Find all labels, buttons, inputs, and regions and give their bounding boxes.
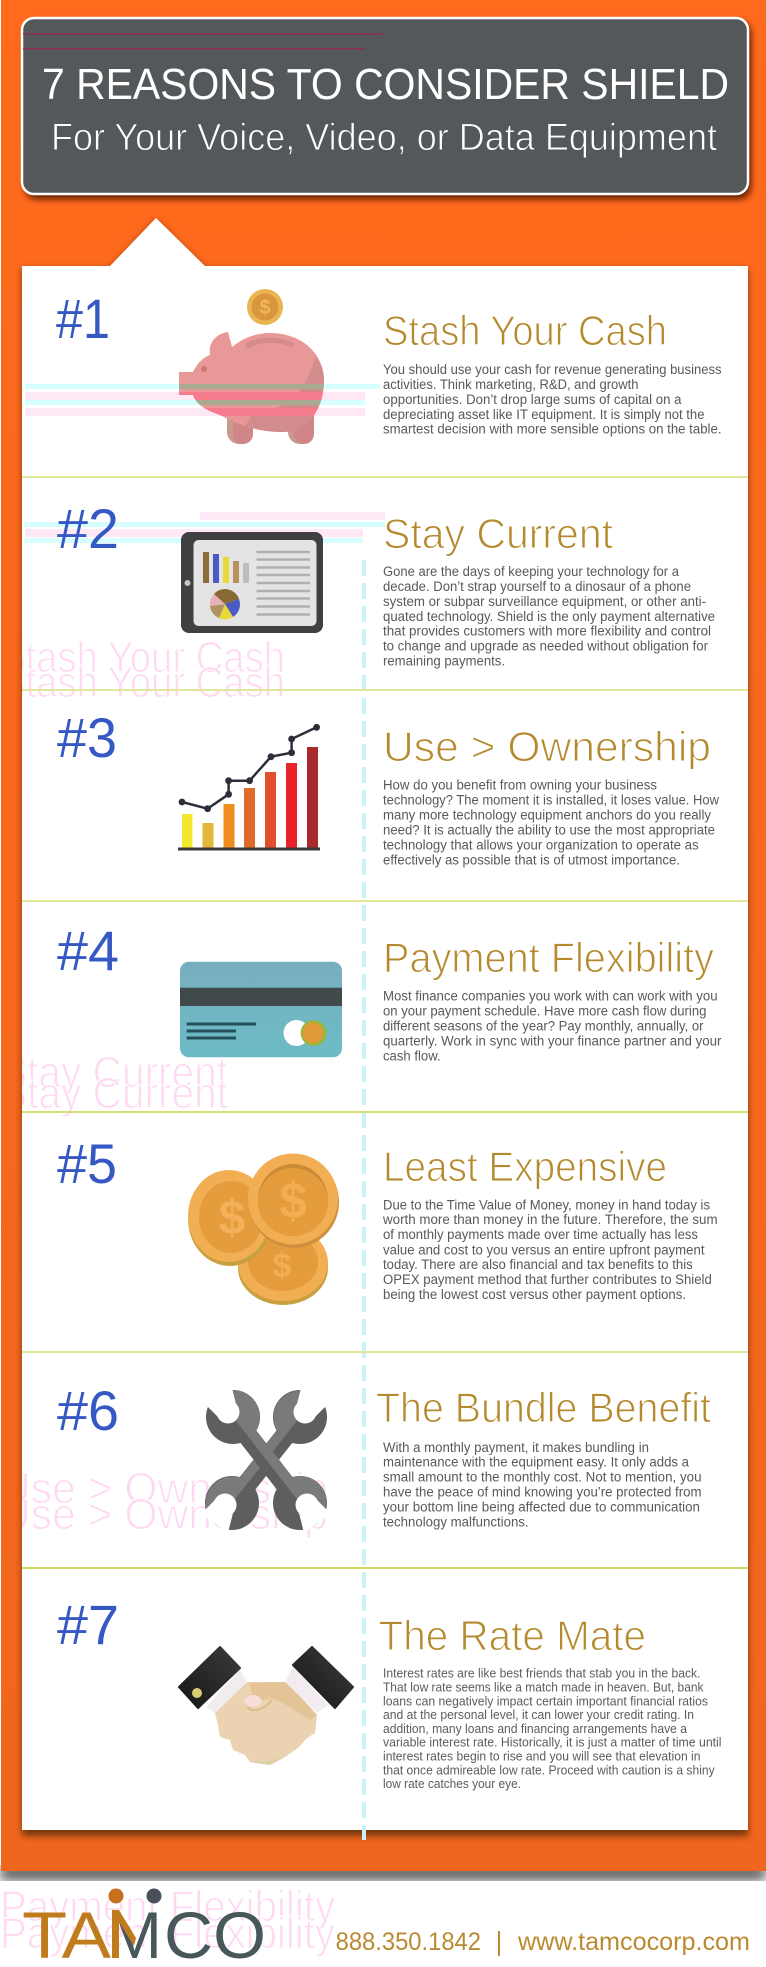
icon: gold coins: $ — [219, 1192, 246, 1245]
body text: opportunities. Don’t drop large sums of capital on a — [383, 392, 682, 407]
text: Stay Current — [0, 1069, 228, 1118]
text: Stay Current — [0, 1048, 228, 1097]
phone number: 888.350.1842 — [336, 1928, 481, 1956]
icon: gold coins — [188, 1154, 339, 1305]
website: www.tamcocorp.com — [517, 1928, 750, 1956]
body text — [383, 778, 719, 867]
body text: to change and upgrade as needed without obligation for — [383, 639, 708, 654]
body text: Due to the Time Value of Money, money in hand today is — [383, 1197, 710, 1212]
heading: Payment Flexibility — [383, 934, 714, 981]
title: 7 REASONS TO CONSIDER SHIELD — [42, 60, 729, 109]
text: Stash Your Cash — [0, 633, 285, 682]
body text: low rate catches your eye. — [383, 1777, 521, 1791]
text: Use > Ownership — [0, 1464, 328, 1513]
body text — [382, 1197, 718, 1302]
body text: on your payment schedule. Have more cash flow during — [383, 1004, 706, 1019]
body text: activities. Think marketing, R&D, and growth — [383, 377, 638, 392]
body text: How do you benefit from owning your business — [383, 778, 657, 793]
icon: gold coins: $ — [279, 1173, 307, 1229]
body text: remaining payments. — [383, 654, 505, 669]
body text — [383, 1440, 702, 1530]
number 4: #4 — [57, 919, 119, 982]
heading: Use > Ownership — [383, 723, 711, 770]
body text: Most finance companies you work with can work with you — [383, 989, 718, 1004]
icon: piggy bank with coin — [170, 289, 330, 444]
body text: have the peace of mind knowing you’re protected from — [383, 1484, 702, 1499]
body text: that provides customers with more flexibility and control — [383, 624, 711, 639]
body text: today. There are also financial and tax benefits to this — [383, 1257, 693, 1272]
body text: Interest rates are like best friends that stab you in the back. — [383, 1666, 700, 1680]
body text: addition, many loans and financing arrangements have a — [383, 1722, 687, 1736]
body text: being the lowest cost versus other payment options. — [383, 1287, 686, 1302]
body text: technology malfunctions. — [383, 1514, 529, 1530]
panel: reason 7 — [57, 1593, 722, 1791]
footer — [22, 1888, 750, 1967]
heading: Stay Current — [383, 510, 613, 557]
body text: system or subpar surveillance equipment, or other anti- — [383, 594, 706, 609]
body text: small amount to the monthly cost. Not to mention, you — [383, 1470, 702, 1485]
body text — [383, 1666, 722, 1791]
number 3: #3 — [57, 706, 117, 769]
text: Stash Your Cash — [0, 658, 285, 707]
icon: handshake — [179, 1647, 353, 1765]
icon: tablet with charts — [181, 532, 323, 633]
icon: crossed wrenches — [201, 1384, 331, 1533]
text: Use > Ownership — [0, 1490, 328, 1539]
body text: maintenance with the equipment easy. It only adds a — [383, 1454, 689, 1470]
text: Payment Flexibility — [0, 1909, 335, 1958]
panel: reason 4 — [57, 919, 722, 1063]
panel: reason 6 — [57, 1379, 711, 1533]
body text: need? It is actually the ability to use the most appropriate — [383, 823, 715, 838]
body text: That low rate seems like a match made in heaven. But, bank — [383, 1680, 704, 1694]
body text: OPEX payment method that further contributes to Shield — [383, 1272, 712, 1287]
icon: piggy bank with coin: $ — [259, 297, 271, 319]
body text — [383, 362, 722, 436]
number 2: #2 — [57, 497, 119, 560]
body text: technology that allows your organization to operate as — [383, 837, 699, 852]
panel: reason 3 — [57, 706, 719, 867]
heading: The Rate Mate — [378, 1612, 646, 1659]
body text: your bottom line being affected due to communication — [383, 1499, 700, 1514]
panel: reason 1 — [56, 287, 722, 444]
heading: The Bundle Benefit — [376, 1384, 711, 1431]
icon: gold coins: $ — [273, 1247, 292, 1285]
body text: technology? The moment it is installed, it loses value. How — [383, 793, 719, 808]
body text: many more technology equipment anchors do you really — [383, 807, 711, 822]
heading: Least Expensive — [383, 1143, 667, 1190]
number 6: #6 — [57, 1379, 119, 1442]
body text: worth more than money in the future. Therefore, the sum — [382, 1212, 718, 1227]
icon: rising bar and line chart — [178, 724, 320, 850]
main white panel — [22, 218, 748, 1830]
number 1: #1 — [56, 287, 110, 350]
body text: smartest decision with more sensible options on the table. — [383, 422, 722, 436]
body text: of monthly payments made over time actually has less — [383, 1227, 698, 1242]
panel: reason 5 — [57, 1132, 718, 1305]
icon: credit card — [180, 962, 342, 1057]
subtitle: For Your Voice, Video, or Data Equipment — [51, 117, 717, 159]
body text: and at the personal level, it can lower your credit rating. In — [383, 1708, 694, 1722]
number 5: #5 — [57, 1132, 117, 1195]
body text: variable interest rate. Historically, it is just a matter of time until — [383, 1736, 722, 1750]
body text: that once admireable low rate. Proceed with caution is a shiny — [383, 1763, 715, 1777]
panel: reason 2 — [57, 497, 715, 669]
body text: With a monthly payment, it makes bundling in — [383, 1440, 649, 1455]
body text — [383, 564, 715, 669]
logo: TAMCO — [22, 1888, 266, 1967]
body text: interest rates begin to rise and you will see that elevation in — [383, 1749, 701, 1763]
heading: Stash Your Cash — [383, 307, 667, 354]
text: Payment Flexibility — [0, 1882, 335, 1931]
number 7: #7 — [57, 1593, 119, 1656]
body text: loans can negatively impact certain important financial ratios — [383, 1694, 708, 1708]
body text: cash flow. — [383, 1048, 441, 1063]
body text: quated technology. Shield is the only payment alternative — [383, 609, 715, 624]
body text: value and cost to you versus an entire upfront payment — [383, 1242, 705, 1257]
body text: depreciating asset like IT equipment. It is simply not the — [383, 407, 704, 422]
separator — [498, 1931, 500, 1956]
body text: Gone are the days of keeping your technology for a — [383, 564, 679, 579]
body text: different seasons of the year? Pay monthly, annually, or — [383, 1018, 704, 1033]
body text: effectively as possible that is of utmost importance. — [383, 852, 680, 867]
body text: quarterly. Work in sync with your finance partner and your — [383, 1033, 722, 1048]
body text: You should use your cash for revenue generating business — [383, 362, 722, 377]
body text: decade. Don’t strap yourself to a dinosaur of a phone — [383, 579, 691, 594]
body text — [383, 989, 722, 1063]
main panel shadow — [22, 221, 748, 1836]
header shadow — [25, 22, 751, 199]
header banner — [22, 18, 748, 194]
